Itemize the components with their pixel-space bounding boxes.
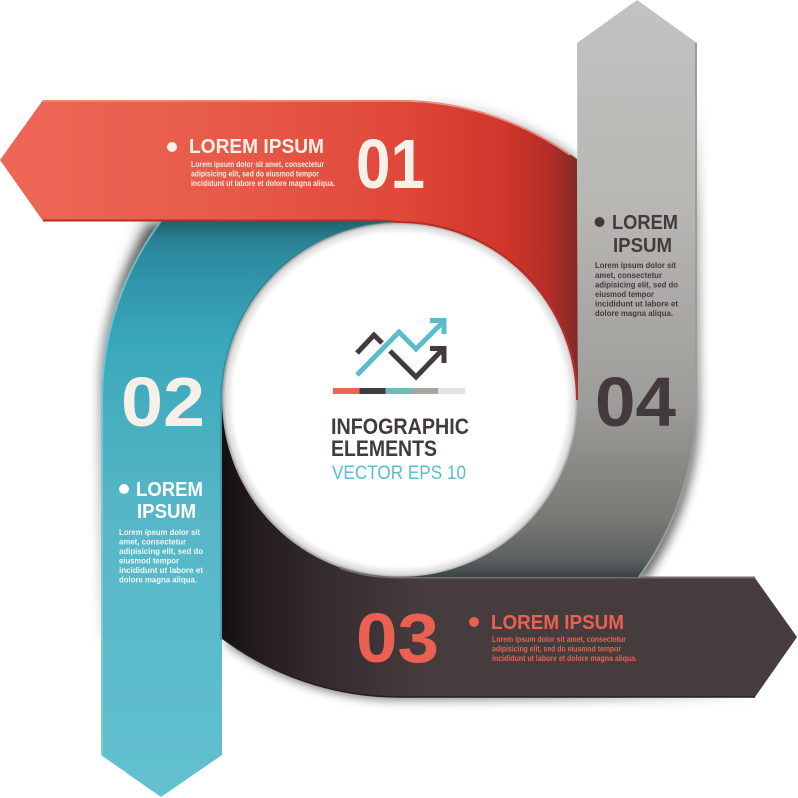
- body 04: adipisicing elit, sed do: [595, 280, 678, 290]
- centre title: [331, 414, 469, 484]
- panel 04: grey arrow: [400, 0, 697, 577]
- number 03: 03: [356, 599, 439, 677]
- body 02: [119, 528, 203, 584]
- number 02: 02: [121, 363, 205, 441]
- number 04: 04: [595, 363, 676, 441]
- heading 04: LOREM: [612, 212, 678, 234]
- body 02: Lorem ipsum dolor sit: [119, 528, 200, 537]
- body 02: amet, consectetur: [119, 538, 186, 546]
- panel 02: blue arrow: [101, 220, 400, 797]
- body 02: dolore magna aliqua.: [119, 576, 197, 584]
- body 04: [595, 261, 678, 318]
- drop shadows: [99, 98, 760, 700]
- centre circle: [220, 220, 580, 580]
- body 02: incididunt ut labore et: [119, 566, 203, 575]
- body 04: amet, consectetur: [595, 271, 662, 280]
- body 01: Lorem ipsum dolor sit amet, consectetur: [191, 160, 324, 169]
- bullet 02: [119, 484, 129, 494]
- body 04: incididunt ut labore et: [595, 300, 678, 308]
- number 01: 01: [356, 125, 425, 203]
- body 04: dolore magna aliqua.: [595, 309, 673, 318]
- centre title: ELEMENTS: [331, 436, 437, 461]
- heading 02: IPSUM: [137, 501, 196, 523]
- bullet 01: [167, 142, 177, 152]
- colour bar: [333, 388, 465, 394]
- body 03: incididunt ut labore et dolore magna aliqua.: [492, 654, 637, 663]
- body 02: eiusmod tempor: [119, 556, 179, 566]
- centre title: VECTOR EPS 10: [332, 463, 466, 484]
- centre title: INFOGRAPHIC: [331, 414, 469, 439]
- body 03: adipisicing elit, sed do eiusmod tempor: [492, 644, 621, 654]
- body 02: adipisicing elit, sed do: [119, 547, 203, 556]
- body 03: Lorem ipsum dolor sit amet, consectetur: [492, 635, 626, 644]
- panel 03: dark arrow: [222, 400, 797, 697]
- heading 04: [612, 212, 678, 257]
- body 04: eiusmod tempor: [595, 290, 654, 299]
- heading 02: LOREM: [136, 479, 203, 501]
- heading 03: LOREM IPSUM: [491, 612, 624, 634]
- panel 01: red arrow: [0, 100, 578, 400]
- bullet 03: [469, 617, 479, 627]
- body 01: incididunt ut labore et dolore magna aliqua.: [191, 179, 335, 188]
- bullet 04: [594, 217, 604, 227]
- heading 02: [136, 479, 203, 523]
- body 04: Lorem ipsum dolor sit: [595, 261, 676, 270]
- body 01: adipisicing elit, sed do eiusmod tempor: [191, 170, 319, 178]
- heading 01: LOREM IPSUM: [189, 136, 324, 158]
- body 03: [492, 635, 637, 663]
- icon: trend arrows: [357, 320, 444, 377]
- heading 04: IPSUM: [613, 235, 672, 257]
- body 01: [191, 160, 335, 188]
